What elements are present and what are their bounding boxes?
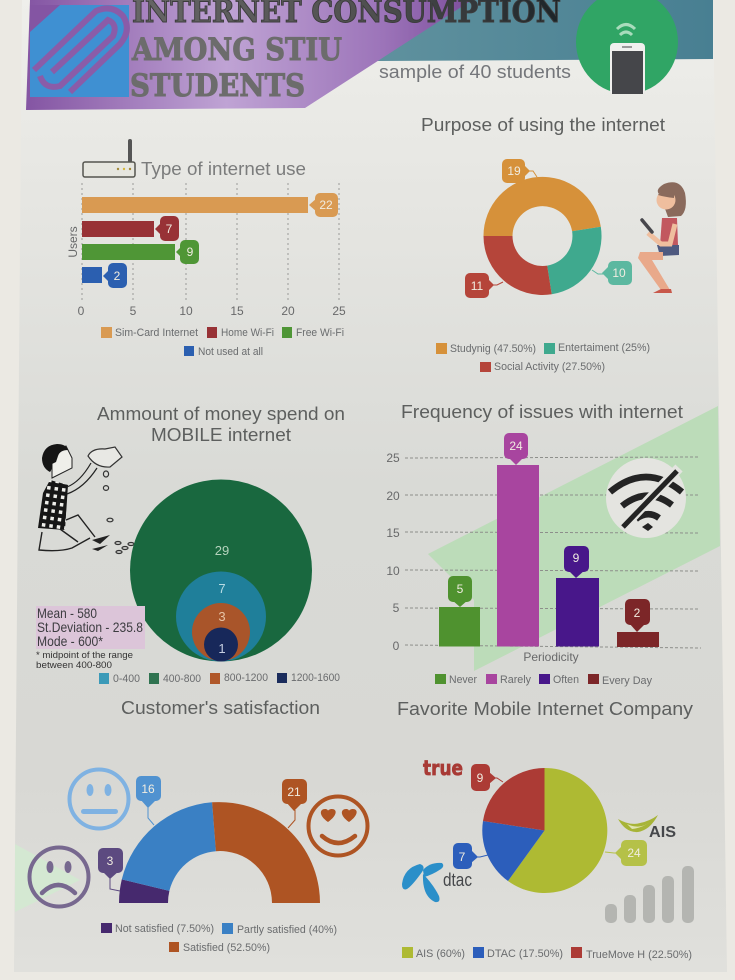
bar: sim-card internet [82,193,338,217]
logo: dtac: dtac [443,870,472,890]
heading: MOBILE internet [151,425,291,445]
heading: Purpose of using the internet [421,115,665,135]
axis title: Periodicity [523,650,579,664]
legend: Entertaiment (25%) [558,342,650,354]
panel: customer's satisfaction [15,698,368,954]
axis numbers: 15 [386,526,400,540]
icon: girl with phone [638,182,686,293]
legend [101,923,337,954]
legend: Studynig (47.50%) [450,343,536,355]
icon: man shaking piggy bank [38,444,134,554]
legend [99,672,340,685]
callout: 19 [502,159,537,183]
bar: not used at all [82,263,127,288]
icon: neutral face [70,770,128,828]
heading: Favorite Mobile Internet Company [397,699,693,719]
legend: Partly satisfied (40%) [237,924,337,936]
legend: Every Day [602,675,652,687]
callout: 24 [605,840,647,866]
background arrow shape [428,406,720,671]
legend: Never [449,674,477,686]
statistics box: St.Deviation - 235.8 [37,619,143,635]
statistics box: Mode - 600* [37,633,103,649]
bar: rarely [497,433,539,646]
panel: favorite mobile internet company [397,699,694,961]
footnote: between 400-800 [36,660,112,671]
bar: every day [617,599,659,647]
title: STUDENTS [130,68,305,104]
legend [436,342,650,373]
callout: 16 [136,776,161,825]
nested circles chart [130,480,312,662]
legend: Sim-Card Internet [115,327,198,339]
bar: home wi-fi [82,216,179,241]
legend [402,947,692,961]
heading: Ammount of money spend on [97,404,345,424]
callout: 19: 19 [507,164,521,178]
logo: paperclip [30,5,129,97]
axis numbers: 0 [78,304,85,318]
bar: not used at all: 2 [114,269,121,283]
callout: 7 [453,843,488,869]
legend: 400-800 [163,673,201,685]
bar: free wi-fi: 9 [187,245,194,259]
teal banner shape [375,0,713,61]
callout: 16: 16 [141,782,155,796]
callout: 10 [592,261,632,285]
title [130,0,561,104]
footnote [36,650,133,671]
bar: rarely: 24 [509,439,523,453]
icon: sad face [30,848,88,906]
bar: often: 9 [573,551,580,565]
callout: 10: 10 [612,266,626,280]
legend: Social Activity (27.50%) [494,361,605,373]
footnote: * midpoint of the range [36,650,133,661]
background triangle [15,844,80,912]
logo: ais: AIS [649,824,676,841]
legend: TrueMove H (22.50%) [586,949,692,961]
legend: Rarely [500,674,531,686]
legend: 1200-1600 [291,672,340,684]
icon: signal bars [605,866,694,923]
bar: free wi-fi [82,240,199,264]
panel: type of internet use [66,139,346,358]
bar: every day: 2 [634,606,641,620]
icon: heart eyes face [308,796,368,856]
axis numbers: 10 [179,304,193,318]
heading: Frequency of issues with internet [401,402,683,422]
legend: Home Wi-Fi [221,327,274,339]
purple banner shape [26,0,472,110]
legend: Not used at all [198,346,263,358]
legend: AIS (60%) [416,948,465,960]
icon: phone with signal [576,0,678,94]
axis numbers: 25 [332,304,346,318]
bar: home wi-fi: 7 [166,222,173,236]
axis numbers: 5 [130,304,137,318]
title: AMONG STIU [131,32,342,68]
axis numbers: 25 [386,451,400,465]
bar: never: 5 [457,582,464,596]
logo: true: true [423,756,463,780]
header banner [26,0,713,110]
axis numbers [78,304,346,318]
nested circles chart: 3 [218,609,226,624]
legend: 0-400 [113,673,140,685]
callout: 9: 9 [477,771,484,785]
donut chart [483,177,602,295]
bar: often [556,546,599,646]
axis numbers: 5 [393,601,400,615]
legend: DTAC (17.50%) [487,948,563,960]
callout: 11 [465,273,503,298]
subtitle: sample of 40 students [379,62,571,82]
axis label: Users [66,226,80,258]
logo: ais [618,815,676,841]
legend: Often [553,674,579,686]
heading: Customer's satisfaction [121,698,320,718]
legend: Satisfied (52.50%) [183,942,270,954]
axis numbers: 20 [281,304,295,318]
panel: frequency of issues with internet [386,402,720,687]
legend: Not satisfied (7.50%) [115,923,214,935]
callout: 11: 11 [471,279,484,293]
callout: 7: 7 [459,850,466,864]
axis numbers: 15 [230,304,244,318]
callout: 3 [98,848,123,891]
bar: sim-card internet: 22 [319,198,333,212]
axis numbers: 10 [386,564,400,578]
icon: router [83,139,135,177]
pie chart [482,768,607,893]
legend: 800-1200 [224,672,268,684]
callout: 24: 24 [627,846,641,860]
nested circles chart: 29 [215,543,229,558]
callout: 21 [282,779,307,828]
callout: 9 [471,764,503,791]
icon: no wifi [606,458,686,538]
half donut chart [119,802,320,903]
heading [97,404,345,445]
callout: 21: 21 [287,785,301,799]
panel: purpose of using the internet [421,115,686,373]
heading: Type of internet use [141,159,306,179]
axis numbers: 20 [386,489,400,503]
nested circles chart: 1 [218,641,226,656]
panel: money spend on mobile internet [36,404,345,685]
callout: 3: 3 [107,854,114,868]
statistics box: Mean - 580 [37,605,97,621]
axis numbers [386,451,400,653]
legend: Free Wi-Fi [296,327,344,339]
legend [435,674,652,687]
logo: dtac [402,863,472,902]
nested circles chart: 7 [218,581,226,596]
axis numbers: 0 [393,639,400,653]
statistics box [36,605,145,649]
bar: never [439,576,480,646]
legend [101,327,344,358]
